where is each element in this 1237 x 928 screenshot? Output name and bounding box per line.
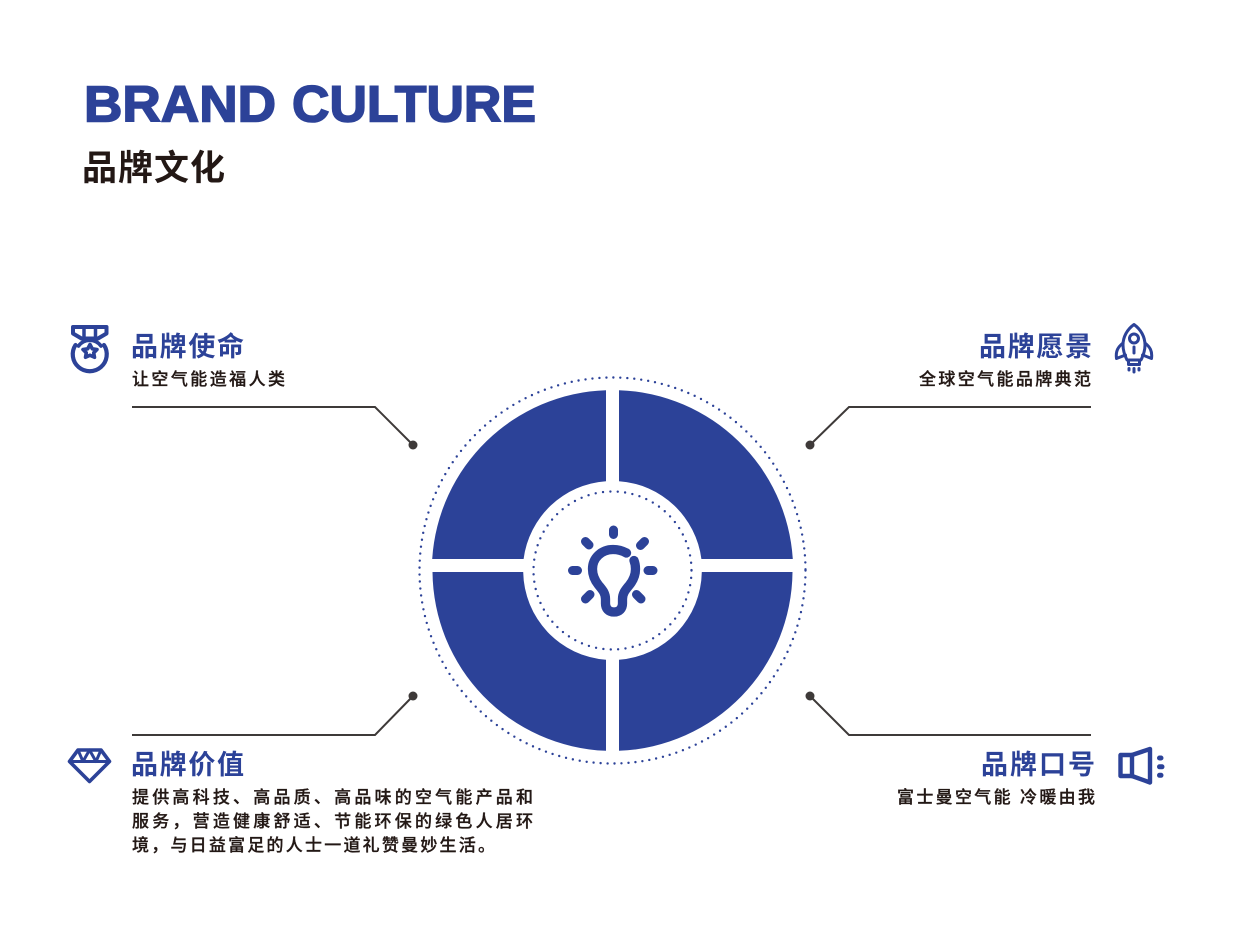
description: 境，与日益富足的人士一道礼赞曼妙生活。 [132, 835, 495, 855]
heading: 品牌价值 [131, 750, 244, 780]
connector: top right [806, 407, 1091, 450]
icon: medal [73, 327, 107, 371]
title: BRAND [84, 76, 276, 132]
description: 提供高科技、高品质、高品味的空气能产品和 [132, 788, 533, 807]
connector: bottom right [806, 692, 1091, 735]
heading: 品牌使命 [131, 331, 244, 362]
connector: top left [132, 407, 418, 450]
quadrant: bottom left [432, 572, 606, 751]
quadrant: bottom right [619, 572, 792, 751]
title [84, 76, 536, 132]
quadrant: top right [619, 390, 793, 559]
icon: rocket [1116, 324, 1152, 372]
outer dotted ring [420, 378, 806, 764]
description: 富士曼空气能 冷暖由我 [897, 787, 1095, 807]
inner dotted ring [534, 492, 692, 650]
connector: bottom left [132, 692, 418, 735]
panel: brand slogan [897, 749, 1162, 807]
quadrant: top left [432, 390, 606, 559]
icon: diamond [70, 750, 110, 782]
heading: 品牌口号 [981, 750, 1095, 780]
description [132, 788, 533, 855]
icon: light bulb [572, 530, 653, 612]
subtitle: 品牌文化 [82, 149, 225, 188]
panel: brand mission [73, 327, 285, 389]
title: CULTURE [292, 76, 536, 132]
panel: brand value [70, 750, 533, 855]
heading: 品牌愿景 [979, 332, 1092, 362]
panel: brand vision [919, 324, 1152, 389]
central donut diagram [420, 378, 806, 764]
description: 服务，营造健康舒适、节能环保的绿色人居环 [132, 811, 533, 831]
description: 让空气能造福人类 [132, 370, 285, 389]
description: 全球空气能品牌典范 [919, 369, 1091, 389]
icon: megaphone [1120, 749, 1162, 782]
